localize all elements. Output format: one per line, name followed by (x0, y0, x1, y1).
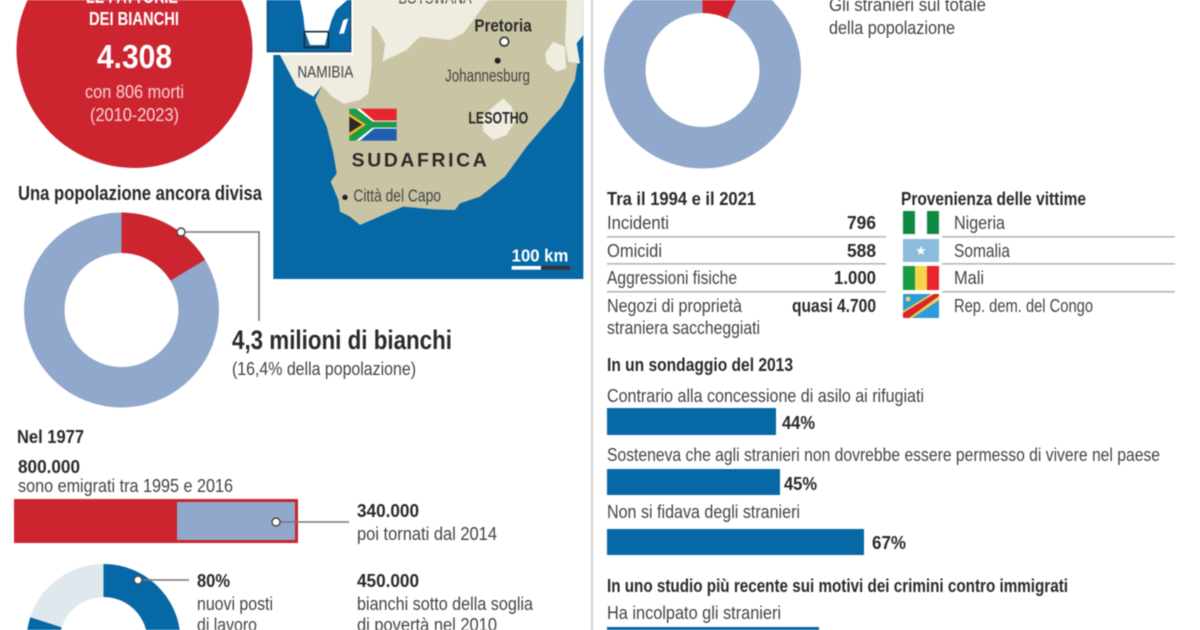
heading: una popolazione ancora divisa: Una popolazione ancora divisa (18, 183, 263, 205)
chart: survey bars: 67% (872, 533, 906, 553)
chart: white population donut (44, 212, 259, 387)
label: sudafrica: SUDAFRICA (352, 151, 487, 172)
marker: johannesburg (495, 58, 501, 64)
label: pretoria: Pretoria (474, 16, 533, 36)
text: nuovi posti: nuovi posti (197, 594, 273, 614)
callout: 4,3 milioni di bianchi: 4,3 milioni di bianchi (232, 325, 452, 355)
icon: mali flag (903, 266, 939, 290)
table: provenienza delle vittime (901, 189, 1175, 318)
table: tra il 1994 e il 2021: 1.000 (834, 268, 876, 288)
label: lesotho: LESOTHO (468, 108, 528, 127)
table: provenienza delle vittime: Mali (954, 268, 984, 288)
chart: survey bars: 45% (784, 474, 817, 494)
table: provenienza delle vittime: Nigeria (954, 213, 1006, 233)
table: provenienza delle vittime: Somalia (954, 241, 1011, 261)
heading: studio più recente: In uno studio più recente sui motivi dei crimini contro immigrati (607, 576, 1068, 596)
table: tra il 1994 e il 2021: 796 (847, 213, 876, 233)
text: sono emigrati: sono emigrati tra 1995 e 2016 (18, 476, 233, 496)
label: johannesburg: Johannesburg (445, 66, 530, 86)
number: 800.000: 800.000 (18, 457, 80, 477)
table: tra il 1994 e il 2021: Omicidi (607, 241, 662, 261)
number: 80%: 80% (197, 571, 230, 591)
chart: recent study bar: Ha incolpato gli stranieri (607, 603, 781, 623)
icon: congo flag (903, 294, 939, 318)
heading: dei bianchi: DEI BIANCHI (89, 9, 179, 29)
table: tra il 1994 e il 2021: Negozi di proprietà (607, 296, 743, 316)
chart: new jobs donut (27, 564, 189, 630)
chart: recent study bar (607, 603, 819, 630)
table: tra il 1994 e il 2021: straniera saccheggiati (607, 318, 760, 338)
panel: le fattorie dei bianchi (16, 0, 252, 168)
chart: survey bars: Contrario alla concessione di asilo ai rifugiati (607, 386, 924, 406)
map: south africa (265, 0, 583, 279)
text: bianchi sotto soglia: bianchi sotto della soglia (357, 594, 534, 614)
table: provenienza delle vittime: Provenienza delle vittime (901, 189, 1086, 209)
icon: south african flag (349, 109, 397, 141)
table: tra il 1994 e il 2021: Incidenti (607, 213, 669, 233)
table: tra il 1994 e il 2021: Tra il 1994 e il 2021 (607, 189, 756, 209)
scale bar (512, 266, 570, 270)
label: namibia: NAMIBIA (297, 62, 354, 81)
chart: emigrants bar (14, 499, 349, 543)
label: scale 100 km: 100 km (512, 246, 568, 266)
icon: somalia flag (903, 239, 939, 262)
chart: survey bars (607, 386, 1160, 555)
heading: in un sondaggio del 2013: In un sondaggio del 2013 (607, 355, 793, 375)
text: della popolazione: della popolazione (829, 18, 955, 38)
table: provenienza delle vittime: Rep. dem. del Congo (954, 296, 1093, 316)
text: con 806 morti: con 806 morti (85, 82, 184, 102)
region: lesotho (482, 98, 516, 140)
marker: città del capo (342, 195, 348, 200)
chart: survey bars: 44% (782, 413, 815, 433)
chart: survey bars: Non si fidava degli stranieri (607, 502, 800, 522)
number: 340.000: 340.000 (357, 501, 419, 521)
number: 450.000: 450.000 (357, 571, 419, 591)
label: città del capo: Città del Capo (353, 186, 441, 206)
number: 4.308: 4.308 (97, 38, 172, 75)
text: 16,4% della popolazione: (16,4% della popolazione) (232, 359, 416, 379)
chart: foreigners donut (625, 0, 780, 148)
text: poi tornati: poi tornati dal 2014 (357, 524, 497, 544)
text: 2010-2023: (2010-2023) (90, 105, 179, 125)
table: tra il 1994 e il 2021: Aggressioni fisiche (607, 268, 737, 288)
table: tra il 1994 e il 2021 (607, 189, 886, 338)
icon: nigeria flag (903, 211, 939, 234)
icon: somalia flag: ★ (915, 244, 927, 259)
table: tra il 1994 e il 2021: quasi 4.700 (792, 296, 876, 316)
table: tra il 1994 e il 2021: 588 (847, 241, 876, 261)
inset: africa locator (265, 0, 353, 55)
region: swaziland (545, 42, 566, 72)
marker: pretoria (500, 37, 509, 46)
heading: nel 1977: Nel 1977 (17, 427, 84, 447)
